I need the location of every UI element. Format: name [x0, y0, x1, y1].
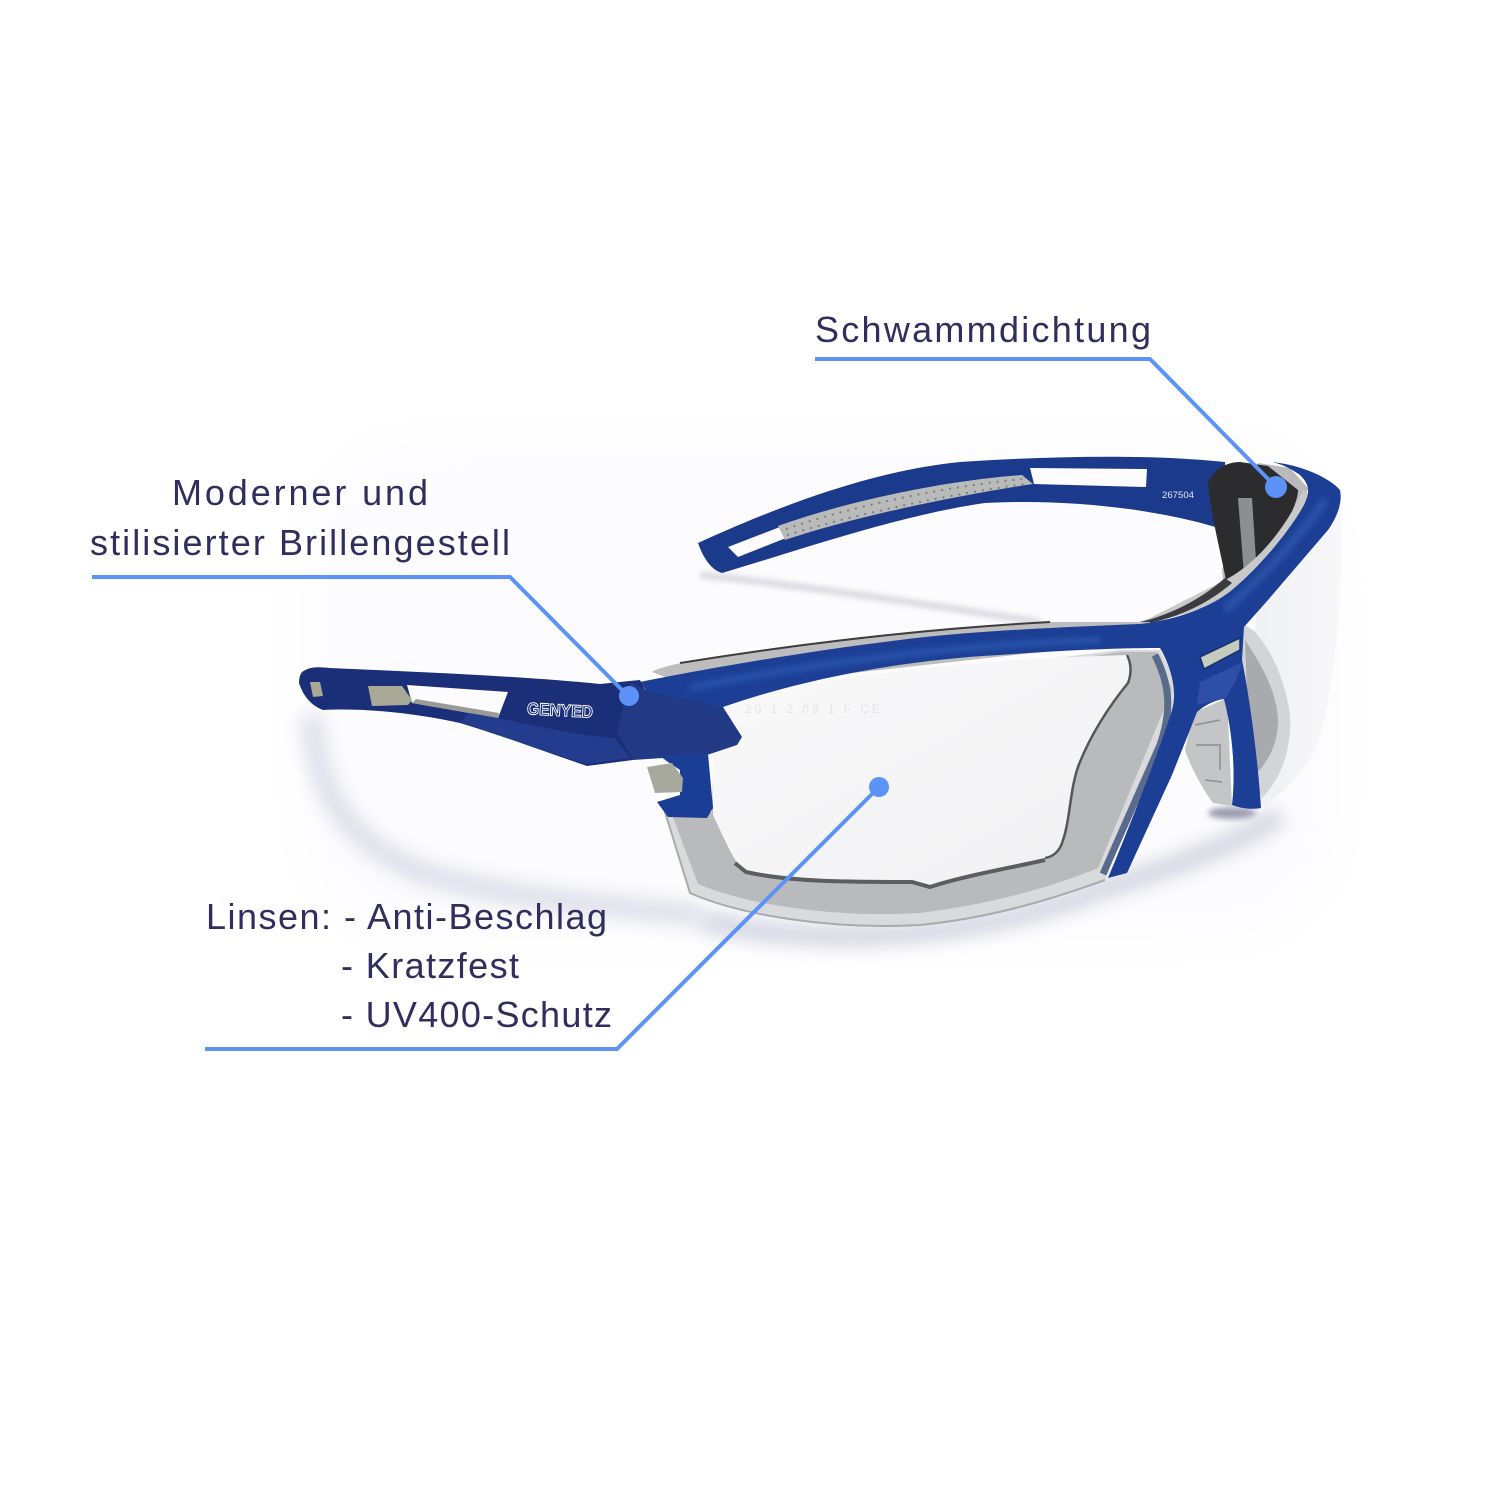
right lens (far side): [1240, 505, 1342, 808]
leader line: [205, 787, 879, 1049]
callout dot: [619, 686, 639, 706]
callout text: Schwammdichtung: [815, 309, 1151, 350]
grey temple clips: [368, 686, 412, 706]
callout dot: [1265, 476, 1287, 498]
callout text: - Kratzfest: [341, 945, 519, 986]
callout text: [206, 896, 612, 1035]
blue frame front: [640, 462, 1341, 878]
grey gasket inside far corner: [1222, 463, 1308, 597]
nose pad grey: [1185, 698, 1232, 806]
frame highlight: [690, 640, 1100, 688]
black foam seal, far side: [1208, 462, 1298, 580]
callout text: [90, 472, 510, 563]
glasses product illustration: [299, 457, 1342, 936]
side shading on arm: [460, 712, 630, 764]
callout text: - UV400-Schutz: [341, 994, 612, 1035]
top gasket behind brow: [652, 622, 1150, 690]
stem under hinge: [647, 754, 713, 818]
GENYED logo: GENYED: [527, 699, 593, 722]
soft background glow: [300, 440, 1340, 940]
lens inner edge and foam: [735, 655, 1130, 887]
callout text: Moderner und: [172, 472, 428, 513]
lower gasket and clear rim: [664, 650, 1180, 926]
left temple arm: [299, 667, 650, 766]
callout: Schwammdichtung: [815, 309, 1287, 498]
callout dot: [869, 777, 889, 797]
lens markings: 20 1 2 09 1 F CE: [745, 702, 880, 716]
callout text: Linsen: - Anti-Beschlag: [206, 896, 607, 937]
clear lens opening: [713, 655, 1130, 885]
model number: 267504: [1162, 490, 1194, 500]
callout text: stilisierter Brillengestell: [90, 522, 510, 563]
far temple arm: [698, 457, 1225, 573]
callout: Linsen: [205, 777, 889, 1049]
cast shadows: [312, 575, 1280, 936]
translucent inner band of the frame: [1103, 655, 1168, 874]
leader line: [92, 577, 628, 696]
grey vent insert: [1200, 638, 1240, 669]
far side gasket: [1240, 622, 1290, 798]
perforated temple pad: [778, 475, 1033, 540]
hinge block: [617, 682, 742, 760]
leader line: [815, 359, 1276, 487]
callout: Moderner und stilisierter Brillengestell: [90, 472, 639, 706]
